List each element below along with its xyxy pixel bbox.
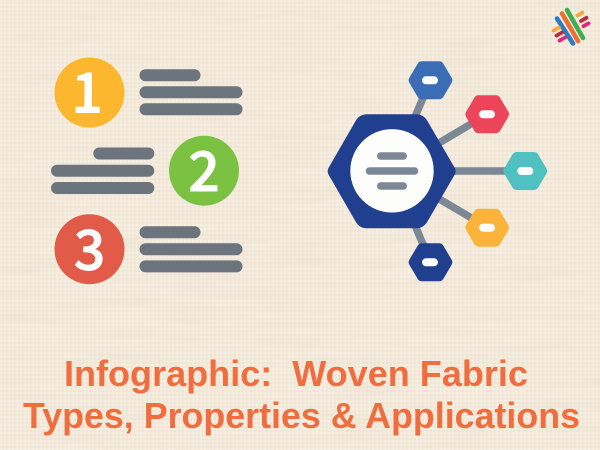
connector lines bbox=[392, 80, 525, 262]
central circle with lines bbox=[350, 129, 434, 212]
satellite hexagon: teal bbox=[503, 152, 547, 190]
number badge 2 bbox=[169, 127, 239, 207]
hexagon hub diagram bbox=[328, 61, 547, 281]
title: Types, Properties & Applications bbox=[23, 395, 580, 436]
list item 3 bbox=[54, 206, 242, 286]
list item 1 bbox=[54, 48, 242, 128]
satellite hexagon: blue bbox=[409, 61, 452, 99]
brand logo bbox=[554, 10, 588, 44]
title bbox=[23, 353, 580, 436]
title: Infographic: Woven Fabric bbox=[64, 353, 528, 394]
number badge 3 bbox=[54, 206, 124, 286]
text placeholder bars 2 bbox=[51, 148, 154, 194]
number badge 3: 3 bbox=[74, 206, 105, 286]
satellite hexagon: red bbox=[465, 95, 509, 133]
number badge 2: 2 bbox=[188, 127, 220, 207]
number badge 1 bbox=[54, 48, 124, 128]
satellite hexagon: navy bbox=[409, 243, 452, 281]
central hexagon bbox=[328, 114, 456, 228]
number badge 1: 1 bbox=[71, 48, 103, 128]
text placeholder bars 1 bbox=[140, 69, 242, 115]
satellite hexagon: orange bbox=[465, 209, 509, 247]
list item 2 bbox=[51, 127, 239, 207]
text placeholder bars 3 bbox=[140, 226, 242, 272]
